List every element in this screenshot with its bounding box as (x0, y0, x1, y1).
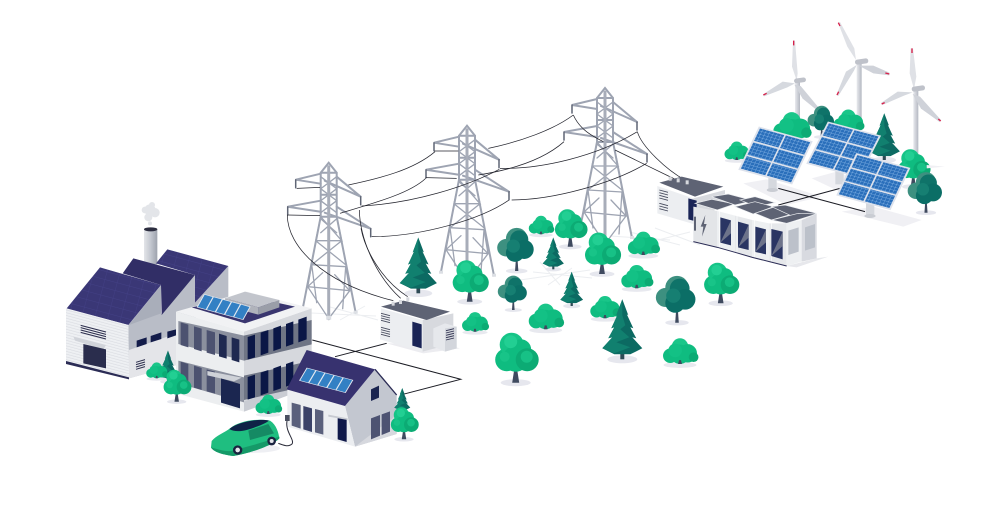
factory side wall (128, 266, 228, 378)
transformer door (412, 322, 422, 348)
pylon 1 (288, 163, 371, 320)
pine 3 (560, 272, 583, 308)
office roof solar panel (197, 294, 251, 320)
bush behind solar panel 1 (773, 112, 812, 144)
bush, solar field left (724, 141, 750, 163)
solar panel 2 (806, 122, 881, 184)
factory front wall (66, 309, 129, 378)
transformer top (381, 301, 450, 320)
bush 6 (590, 296, 621, 322)
battery cabinet with bolt (693, 207, 717, 247)
house front wall (287, 389, 355, 447)
factory side vent (136, 360, 145, 369)
bush 1 (529, 216, 554, 237)
battery tops (695, 194, 817, 223)
transformer side unit (433, 323, 457, 352)
solar panel 3 (836, 153, 910, 218)
pine and tree beside house (391, 388, 419, 442)
transformer shadow (387, 343, 460, 353)
pine 1 (400, 237, 437, 297)
solar panel 1 (738, 126, 813, 192)
bush 3 (621, 265, 653, 292)
office roof (176, 292, 312, 332)
round tree right of panels (898, 149, 931, 189)
bush 5 (529, 304, 564, 333)
tree: dark 1 (497, 228, 534, 273)
pine 2 (543, 237, 564, 271)
overhead power wires (287, 115, 685, 301)
electric car charging (211, 415, 293, 456)
office window bands (178, 317, 312, 402)
pylon 2 (426, 126, 509, 283)
office door (221, 378, 240, 408)
turbine 1 (763, 41, 820, 125)
house side wall (345, 369, 397, 447)
tree: round 5 (495, 333, 539, 386)
chimney with smoke (142, 202, 160, 264)
factory roller door (83, 344, 106, 368)
dark tree far right (908, 172, 942, 215)
transformer body (380, 308, 423, 352)
house roof (287, 350, 375, 406)
tree: round 2 (555, 209, 588, 249)
dark tree behind panels (808, 106, 834, 139)
tree: dark 3 (656, 276, 695, 325)
house (287, 350, 397, 447)
transformer terminals (392, 297, 409, 306)
pine behind panels (869, 113, 900, 163)
house door and awning (328, 415, 348, 442)
transformer (380, 297, 460, 353)
car shadow (217, 444, 280, 453)
battery shadow (787, 257, 828, 267)
bush 7 (663, 338, 698, 368)
turbine 2 (836, 22, 889, 122)
faint pylon ground shadows (311, 228, 700, 320)
panel ground shadows (743, 165, 945, 227)
car roof and windows (229, 420, 269, 431)
bush behind panel 2 (833, 109, 864, 135)
wind turbines (763, 22, 941, 157)
tree: round 3 (585, 232, 621, 277)
car body (211, 420, 279, 456)
pine 4 (602, 299, 642, 363)
pylon 3 (564, 88, 647, 245)
charging cable and wallbox (278, 415, 293, 446)
factory awning (73, 337, 106, 349)
panel cables (778, 188, 865, 212)
bush 4 (462, 312, 489, 335)
tree: round 4 (704, 263, 739, 306)
battery cabinets (717, 211, 817, 266)
office building (176, 292, 312, 412)
office awning (207, 371, 242, 381)
office right face (244, 308, 312, 412)
tree: dark 2 (498, 276, 527, 312)
rooftop unit (225, 292, 279, 315)
transformer vents (381, 313, 390, 337)
bush 2 (628, 232, 660, 259)
substation unit (657, 177, 725, 224)
solar array (738, 122, 945, 227)
bush by office (256, 395, 282, 417)
bush by factory (146, 362, 168, 381)
factory roofs (156, 249, 228, 303)
tree: round 1 (453, 260, 489, 305)
round tree by factory (164, 370, 191, 404)
factory (66, 202, 228, 379)
small pine behind office corner (158, 350, 178, 384)
factory vent (81, 325, 106, 339)
house roof solar panel (299, 368, 353, 393)
factory side windows (137, 329, 176, 347)
car wheels (233, 437, 276, 455)
house windows (292, 386, 390, 439)
ground power lines: buildings to transformer (312, 340, 461, 394)
turbine 3 (881, 48, 941, 157)
office left face (176, 312, 244, 412)
car lower shade (211, 437, 279, 456)
battery storage (657, 177, 828, 267)
